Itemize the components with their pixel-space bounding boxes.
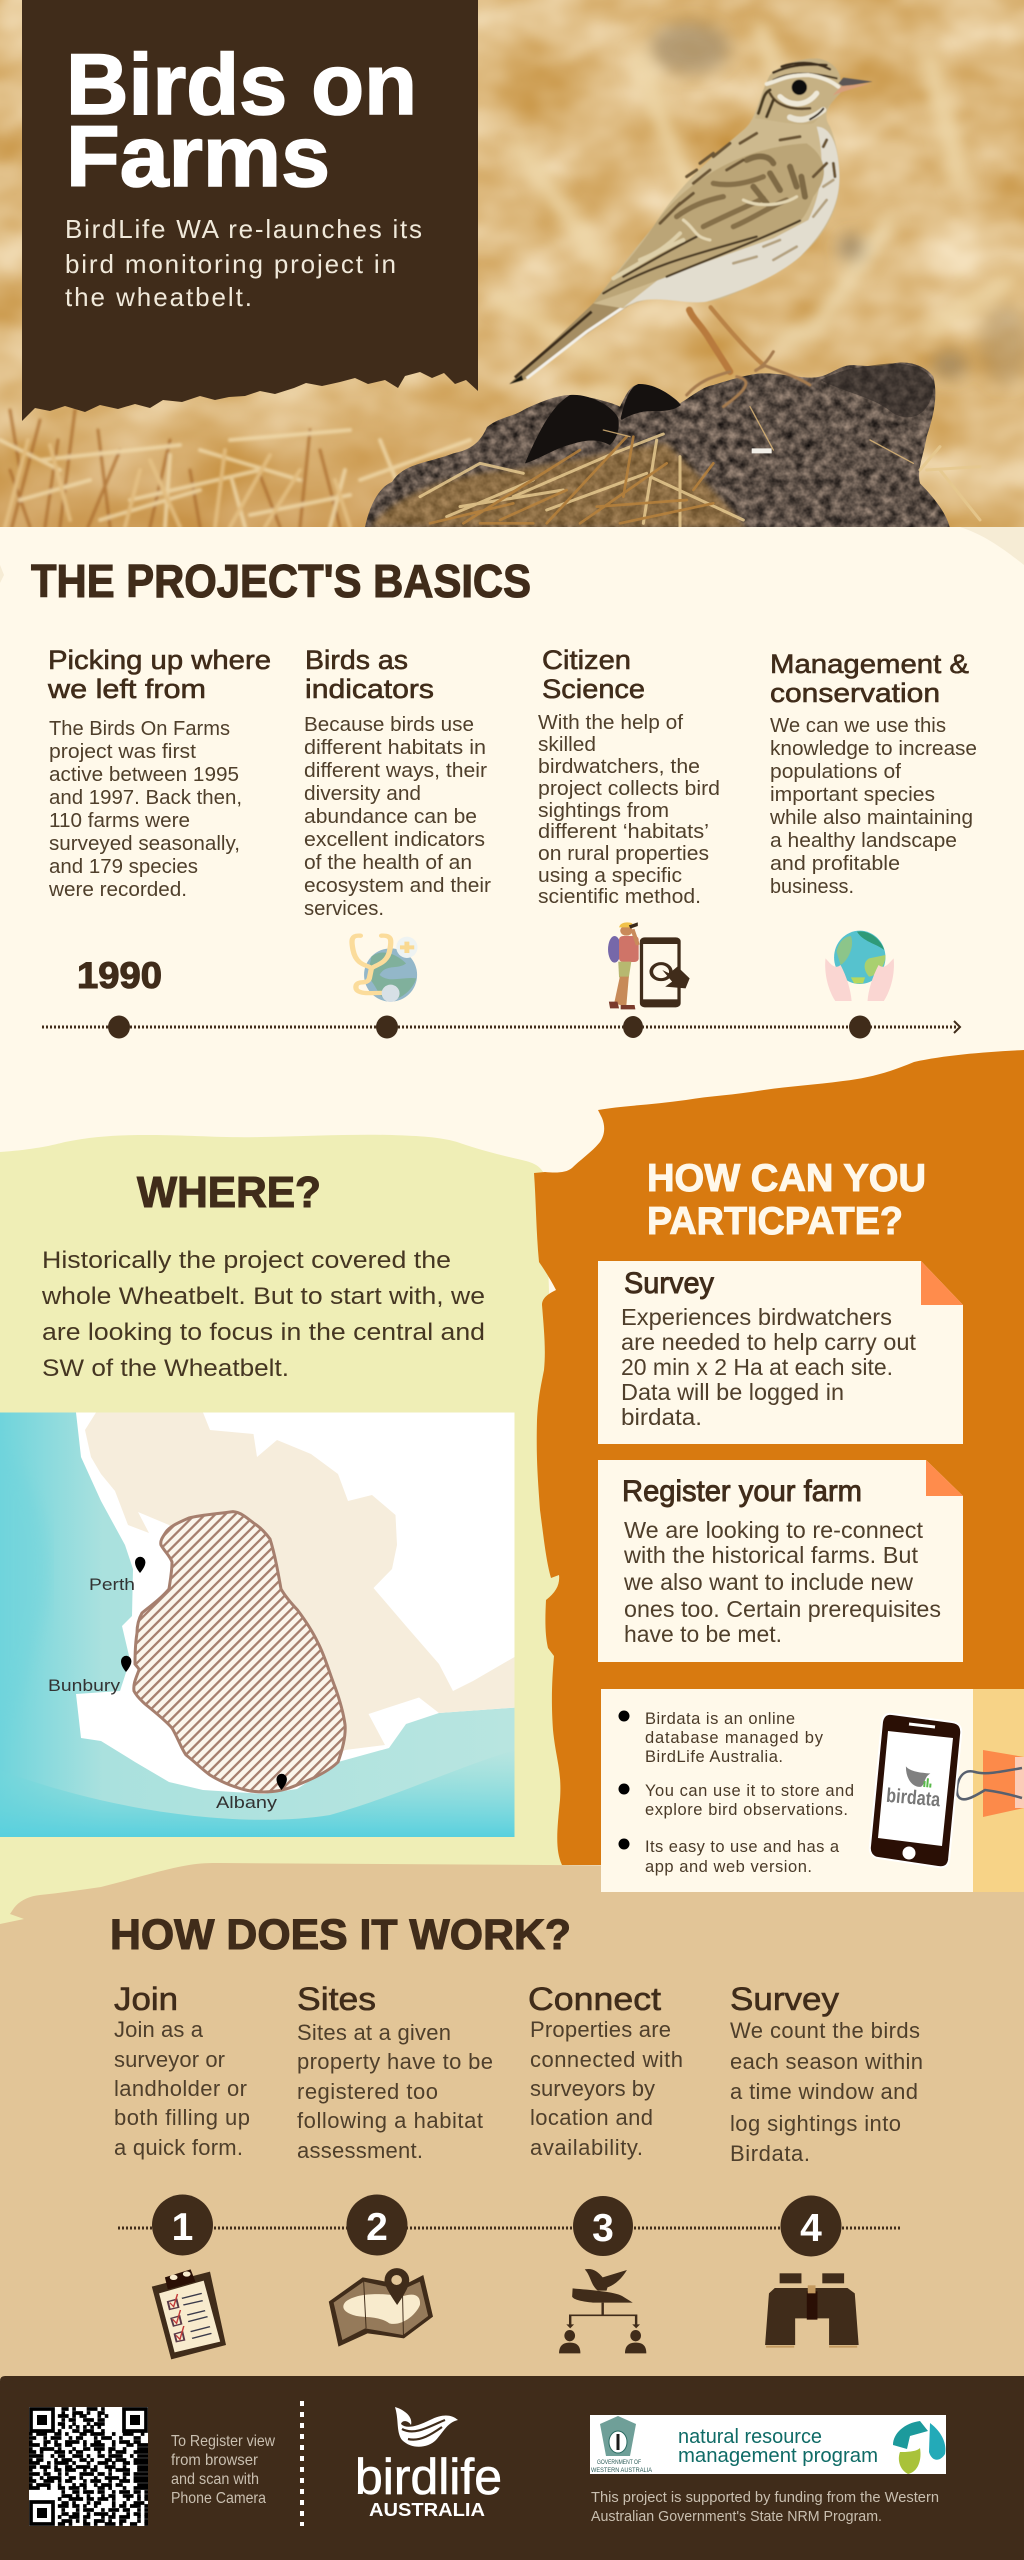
numbered steps timeline <box>118 2194 900 2256</box>
bird body <box>593 58 840 308</box>
step text: join: Join <box>114 1981 178 2017</box>
panel: birdata <box>601 1689 1024 1892</box>
column: birds as indicators <box>304 645 491 920</box>
birdata bullet list: Its easy to use and has a <box>645 1838 840 1856</box>
subtitle: bird monitoring project in <box>65 249 396 279</box>
column: birds as indicators: indicators <box>305 674 434 704</box>
timeline arrow <box>42 1016 960 1038</box>
funding acknowledgement: Australian Government's State NRM Program. <box>591 2508 882 2525</box>
step text: join: a quick form. <box>114 2135 243 2160</box>
birdata bullet list: BirdLife Australia. <box>645 1748 783 1766</box>
column: management and conservation: knowledge to increase <box>770 738 977 760</box>
title panel <box>22 0 478 421</box>
column: birds as indicators: different ways, their <box>304 760 487 782</box>
step text: survey <box>730 1981 923 2166</box>
bird, drawn in photo coordinates <box>509 58 873 407</box>
step text: sites: assessment. <box>297 2138 423 2163</box>
natural resource management program logo: management program <box>678 2444 878 2467</box>
map hatched survey area <box>134 1512 345 1792</box>
step text: survey: Birdata. <box>730 2141 810 2166</box>
column: birds as indicators: Because birds use <box>304 714 474 736</box>
NRM program emblem <box>893 2421 945 2474</box>
hero photo: bird on a mound in a stubble field <box>0 0 1024 547</box>
map pins and town labels <box>48 1557 287 1812</box>
photo background: blurred straw field <box>0 0 1024 547</box>
column: birds as indicators: excellent indicators <box>304 829 485 851</box>
title: Birds on <box>66 37 417 133</box>
birdata bullet list: app and web version. <box>645 1858 812 1876</box>
column: citizen science: on rural properties <box>538 843 709 865</box>
card: survey: are needed to help carry out <box>621 1329 917 1355</box>
card: register your farm: ones too. Certain prerequisites <box>624 1596 941 1622</box>
participate panel background <box>534 1050 1024 1865</box>
map pins and town labels: Perth <box>89 1575 135 1594</box>
column: birds as indicators: abundance can be <box>304 806 477 828</box>
QR instructions: from browser <box>171 2452 259 2469</box>
QR instructions: and scan with <box>171 2471 259 2488</box>
column: birds as indicators: diversity and <box>304 783 421 805</box>
card: survey <box>598 1261 963 1444</box>
column: management and conservation: Management & <box>770 649 969 679</box>
birdlife australia logo: AUSTRALIA <box>369 2500 485 2520</box>
step text: survey: log sightings into <box>730 2111 901 2136</box>
where paragraph: SW of the Wheatbelt. <box>42 1355 289 1382</box>
column: management and conservation: and profitable <box>770 853 900 875</box>
subtitle <box>65 214 422 312</box>
card: register your farm: we also want to include new <box>623 1569 913 1595</box>
icon: stethoscope on globe <box>352 936 418 1002</box>
step text: sites: following a habitat <box>297 2108 483 2133</box>
column: citizen science: different ‘habitats’ <box>538 821 709 843</box>
column: citizen science: With the help of <box>538 712 683 734</box>
column: birds as indicators: ecosystem and their <box>304 875 491 897</box>
column: birds as indicators: different habitats in <box>304 737 486 759</box>
column: birds as indicators: services. <box>304 898 384 920</box>
where paragraph: are looking to focus in the central and <box>42 1319 485 1346</box>
where panel background <box>0 1135 570 1930</box>
card: survey: 20 min x 2 Ha at each site. <box>621 1354 893 1380</box>
bird wing <box>593 143 824 303</box>
column: picking up where we left from: and 179 species <box>49 856 198 878</box>
step text: join: both filling up <box>114 2105 250 2130</box>
funding acknowledgement: This project is supported by funding from the Western <box>591 2489 939 2506</box>
natural resource management program logo: natural resource <box>678 2425 822 2448</box>
icon: birdwatcher beside phone <box>608 922 690 1009</box>
binder clip <box>957 1750 1024 1817</box>
column: management and conservation: important species <box>770 784 935 806</box>
card: register your farm: have to be met. <box>624 1621 782 1647</box>
card: survey: birdata. <box>621 1404 702 1430</box>
step text: join: Join as a <box>114 2017 204 2042</box>
where paragraph: whole Wheatbelt. But to start with, we <box>41 1283 485 1310</box>
birdlife australia logo: birdlife <box>355 2449 502 2505</box>
column: management and conservation: a healthy landscape <box>770 830 957 852</box>
bird head <box>755 58 843 124</box>
phone showing the birdata logo <box>870 1714 961 1867</box>
title panel background <box>22 0 478 421</box>
footer background <box>0 2376 1024 2560</box>
WA government crest <box>591 2416 652 2474</box>
phone with tapping hand <box>641 939 690 1006</box>
step text: survey: We count the birds <box>730 2018 920 2043</box>
panel: how can you participate? <box>534 1050 1024 1892</box>
natural resource management program logo <box>590 2415 946 2474</box>
birdata bullet list: Birdata is an online <box>645 1710 795 1728</box>
step text: connect: Connect <box>528 1981 661 2017</box>
column: picking up where we left from: active between 1995 <box>49 764 239 786</box>
column: citizen science: project collects bird <box>538 778 720 800</box>
card: register your farm: with the historical farms. But <box>623 1542 919 1568</box>
column: management and conservation: while also maintaining <box>769 807 973 829</box>
heading: the project's basics: THE PROJECT'S BASICS <box>31 555 531 607</box>
title: Farms <box>66 109 330 205</box>
where paragraph <box>41 1247 485 1382</box>
map ocean <box>0 1412 514 1837</box>
card: survey: Data will be logged in <box>621 1379 844 1405</box>
step text: join: surveyor or <box>114 2047 225 2072</box>
column: picking up where we left from: project was first <box>49 741 196 763</box>
heading: how can you participate?: HOW CAN YOU <box>647 1157 926 1200</box>
birdata panel background <box>973 1689 1024 1892</box>
card: survey: Experiences birdwatchers <box>621 1304 892 1330</box>
numbered steps timeline: 2 <box>366 2206 388 2249</box>
step text: connect: availability. <box>530 2135 643 2160</box>
QR code <box>29 2407 148 2526</box>
map land base <box>0 1412 514 1837</box>
column: citizen science: Citizen <box>542 645 631 675</box>
column: birds as indicators: Birds as <box>305 645 408 675</box>
map wheatbelt region <box>85 1412 514 1780</box>
map of south-west Western Australia <box>0 1412 514 1837</box>
column: citizen science: Science <box>542 674 645 704</box>
step text: connect: Properties are <box>530 2017 671 2042</box>
step text: sites <box>297 1981 493 2163</box>
map pins and town labels: Bunbury <box>48 1676 121 1695</box>
panel: how does it work? background <box>0 1863 1024 2380</box>
step text: join: landholder or <box>114 2076 247 2101</box>
foreground straw stems <box>0 410 470 527</box>
column: management and conservation <box>769 649 977 898</box>
column: citizen science: using a specific <box>538 865 682 887</box>
birdata bullet list: explore bird observations. <box>645 1801 848 1819</box>
numbered steps timeline: 3 <box>592 2207 614 2250</box>
column: picking up where we left from: The Birds On Farms <box>49 718 230 740</box>
where paragraph: Historically the project covered the <box>42 1247 451 1274</box>
step text: survey: Survey <box>730 1981 839 2017</box>
heading: where?: WHERE? <box>137 1168 321 1217</box>
subtitle: the wheatbelt. <box>65 282 252 312</box>
card: register your farm <box>598 1460 963 1662</box>
heading: how can you participate? <box>647 1157 926 1243</box>
column: citizen science: birdwatchers, the <box>538 756 700 778</box>
panel: where? <box>0 1135 570 1930</box>
icon: bird over connected people <box>559 2269 646 2353</box>
QR instructions: Phone Camera <box>171 2490 266 2507</box>
column: management and conservation: business. <box>770 876 854 898</box>
panel: how does it work? <box>110 1911 923 2359</box>
column: birds as indicators: of the health of an <box>304 852 472 874</box>
column: management and conservation: populations of <box>770 761 901 783</box>
heading: how does it work?: HOW DOES IT WORK? <box>110 1911 571 1959</box>
QR instructions: To Register view <box>171 2433 275 2450</box>
birdwatcher figure <box>608 922 639 1009</box>
column: picking up where we left from: and 1997. Back then, <box>49 787 242 809</box>
decorative torn corners of the cream section <box>0 527 1024 583</box>
numbered steps timeline: 1 <box>172 2206 193 2249</box>
title <box>66 37 417 205</box>
map pins and town labels: Albany <box>216 1793 278 1812</box>
funding acknowledgement <box>591 2489 939 2525</box>
column: citizen science <box>538 645 720 908</box>
step text: sites: Sites <box>297 1981 376 2017</box>
birdlife australia logo <box>355 2407 502 2520</box>
birdata bullet list <box>618 1710 854 1876</box>
step text: connect: location and <box>530 2105 653 2130</box>
step text: connect: connected with <box>530 2047 683 2072</box>
subtitle: BirdLife WA re-launches its <box>65 214 422 244</box>
birdata bullet list: You can use it to store and <box>645 1782 854 1800</box>
column: picking up where we left from: Picking up where <box>48 645 271 675</box>
card: register your farm: Register your farm <box>622 1475 862 1508</box>
icon: folded map with location pin <box>329 2268 433 2347</box>
year label 1990: 1990 <box>77 955 162 996</box>
column: picking up where we left from: we left from <box>47 674 206 704</box>
bird beak <box>838 78 873 87</box>
bird legs and feet <box>687 307 810 407</box>
icon: binoculars <box>765 2273 859 2347</box>
icon: clipboard checklist <box>152 2269 226 2359</box>
bird belly <box>623 127 839 307</box>
step text: connect: surveyors by <box>530 2076 655 2101</box>
column: citizen science: skilled <box>538 734 596 756</box>
column: picking up where we left from: 110 farms were <box>49 810 190 832</box>
phone showing the birdata logo: birdata <box>885 1785 942 1811</box>
column: management and conservation: We can we use this <box>770 715 946 737</box>
icon: globe in caring hands <box>825 931 894 1001</box>
soil mound with clods, drawn in photo coordinates <box>365 362 980 528</box>
step text: survey: each season within <box>730 2049 923 2074</box>
column: management and conservation: conservation <box>770 678 940 708</box>
card: register your farm: We are looking to re-connect <box>624 1517 924 1543</box>
WA government crest: WESTERN AUSTRALIA <box>591 2468 652 2474</box>
step text: sites: property have to be <box>297 2049 493 2074</box>
numbered steps timeline: 4 <box>800 2207 822 2250</box>
column: picking up where we left from <box>47 645 271 901</box>
panel: the project's basics <box>31 555 977 1038</box>
panel: footer <box>0 2376 1024 2560</box>
column: picking up where we left from: were recorded. <box>48 879 187 901</box>
heading: how can you participate?: PARTICPATE? <box>647 1200 903 1243</box>
birdata bullet list: database managed by <box>645 1729 824 1747</box>
WA government crest: GOVERNMENT OF <box>597 2460 641 2466</box>
step text: sites: registered too <box>297 2079 438 2104</box>
column: citizen science: scientific method. <box>538 886 701 908</box>
step text: join <box>114 1981 250 2160</box>
step text: survey: a time window and <box>730 2079 918 2104</box>
step text: sites: Sites at a given <box>297 2020 451 2045</box>
column: picking up where we left from: surveyed seasonally, <box>49 833 240 855</box>
card: survey: Survey <box>624 1267 714 1300</box>
step text: connect <box>528 1981 683 2160</box>
QR instructions <box>171 2433 275 2507</box>
column: citizen science: sightings from <box>538 800 669 822</box>
bird tail <box>509 302 630 384</box>
